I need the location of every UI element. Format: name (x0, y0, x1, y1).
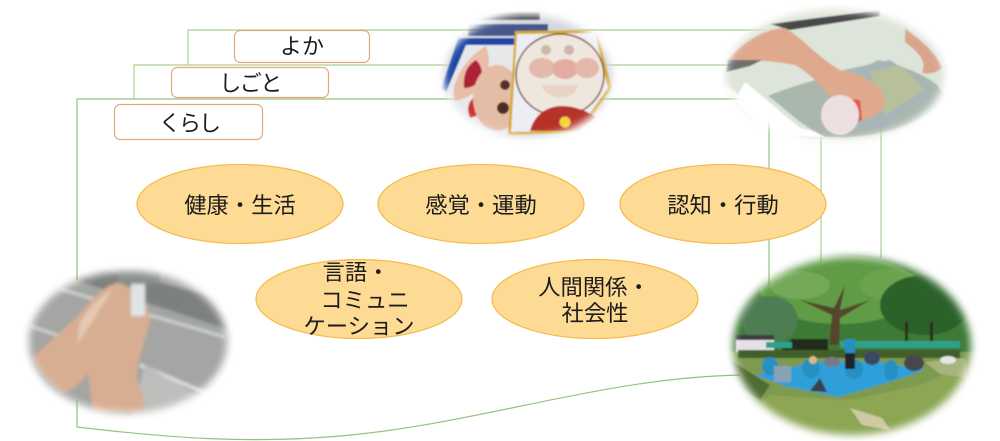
front panel outline: くらし (77, 99, 769, 440)
photo: face puzzle (440, 11, 616, 140)
photo: picnic under trees (722, 250, 982, 441)
label: しごと: しごと (219, 71, 281, 96)
oval: 認知・行動 (620, 164, 826, 244)
oval: 人間関係・社会性: 人間関係・ (538, 275, 650, 300)
oval: 言語・コミュニケーション (256, 260, 462, 339)
label: くらし: くらし (159, 111, 219, 136)
card (508, 30, 612, 135)
label: しごと (172, 68, 328, 98)
label: くらし (114, 104, 262, 140)
photo: hands washing at sink (24, 266, 232, 418)
back panel outline: よか (188, 30, 881, 258)
blue sheet (755, 362, 925, 397)
middle panel outline: しごと (134, 65, 821, 262)
oval: 言語・コミュニケーション: ケーション (303, 314, 415, 339)
oval: 認知・行動: 認知・行動 (667, 193, 779, 218)
photo: hand with bottle in beads (722, 5, 952, 145)
label: よか: よか (280, 34, 324, 59)
oval: 感覚・運動: 感覚・運動 (425, 193, 537, 218)
oval: 言語・コミュニケーション: コミュニ (320, 288, 410, 313)
oval: 健康・生活 (137, 164, 343, 244)
people (762, 339, 898, 380)
oval: 感覚・運動 (378, 164, 584, 244)
oval: 健康・生活: 健康・生活 (184, 193, 296, 218)
oval: 人間関係・社会性 (492, 260, 698, 338)
ear and mouth (454, 46, 489, 101)
oval: 言語・コミュニケーション: 言語・ (323, 260, 389, 285)
label: よか (234, 30, 370, 62)
oval: 人間関係・社会性: 社会性 (562, 301, 628, 326)
